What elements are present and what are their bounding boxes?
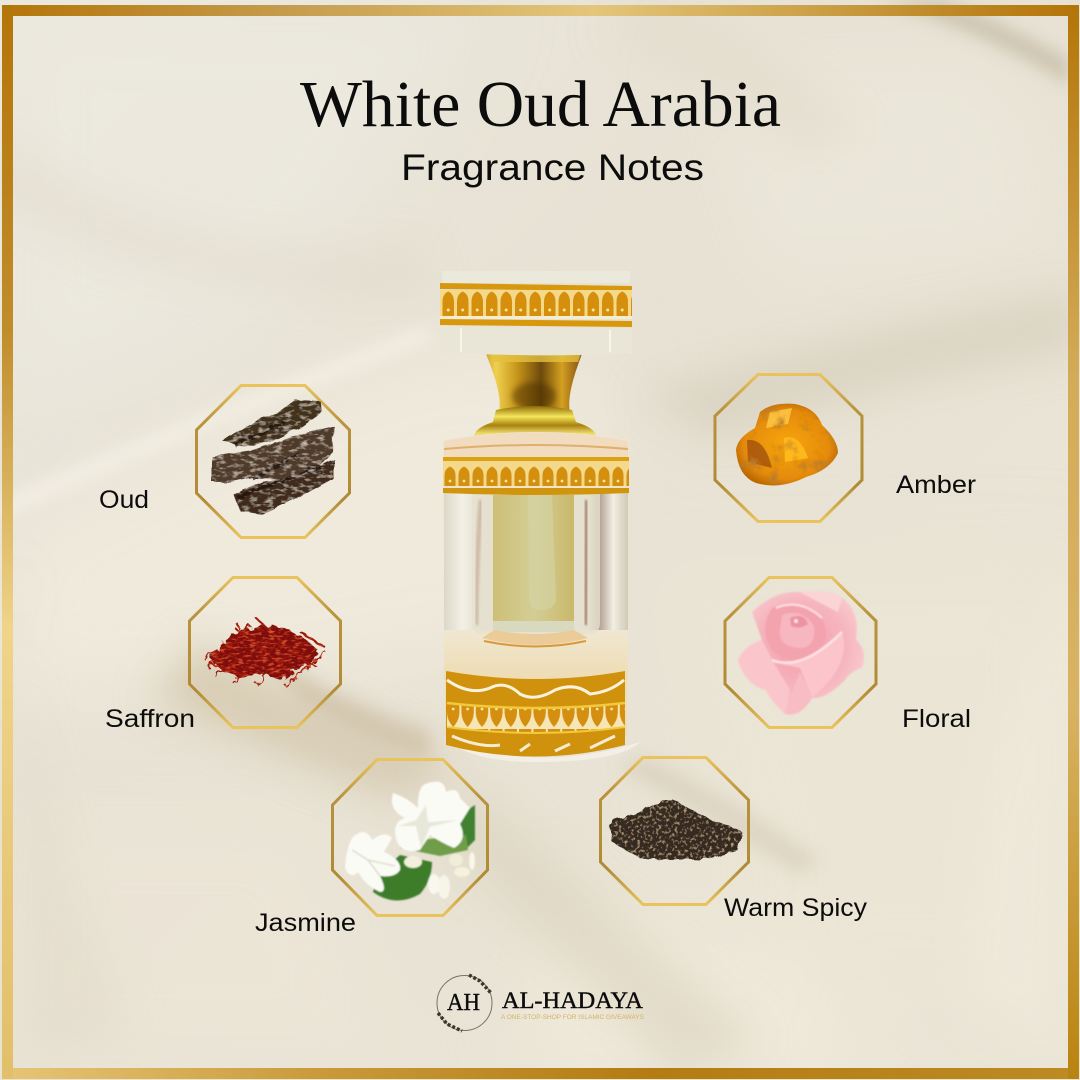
icon: jasmine flowers xyxy=(345,782,475,901)
octagon frame xyxy=(600,758,748,904)
upper body gold band xyxy=(443,457,629,495)
logo wordmark: AL-HADAYA xyxy=(502,988,643,1013)
subtitle: Fragrance Notes xyxy=(401,147,704,188)
note: amber xyxy=(715,374,862,522)
lower body gold band xyxy=(446,671,625,756)
bottle cap xyxy=(440,271,632,355)
label: Amber: Amber xyxy=(896,471,976,499)
label: Saffron: Saffron xyxy=(105,705,195,733)
note: jasmine xyxy=(332,760,488,916)
logo: Al-Hadaya xyxy=(437,975,644,1031)
logo monogram: AH xyxy=(447,990,480,1016)
note: oud xyxy=(196,386,350,538)
label: Oud: Oud xyxy=(99,486,149,514)
icon: oud wood bark xyxy=(212,400,334,515)
label: Jasmine: Jasmine xyxy=(255,909,356,937)
note: saffron xyxy=(190,578,340,728)
top ledge of body xyxy=(444,432,628,458)
note: floral xyxy=(725,578,876,728)
label: Warm Spicy: Warm Spicy xyxy=(724,894,868,922)
icon: saffron threads xyxy=(203,620,326,686)
icon: pink rose xyxy=(738,591,864,715)
neck and gold collar xyxy=(474,354,596,441)
octagon frame xyxy=(715,374,862,522)
octagon frame xyxy=(332,760,488,916)
icon: black pepper pile xyxy=(609,799,742,860)
logo wreath circle xyxy=(437,975,492,1031)
logo tagline: A ONE-STOP-SHOP FOR ISLAMIC GIVEAWAYS xyxy=(501,1015,644,1021)
octagon frame xyxy=(196,386,350,538)
octagon frame xyxy=(190,578,340,728)
oil chamber xyxy=(493,495,574,622)
title: White Oud Arabia xyxy=(300,68,781,141)
perfume bottle xyxy=(440,271,640,762)
octagon frame xyxy=(725,578,876,728)
icon: amber resin xyxy=(736,404,838,485)
note: warm spicy xyxy=(600,758,748,904)
label: Floral: Floral xyxy=(902,705,971,733)
bottle body xyxy=(443,432,629,756)
bottle shadow xyxy=(445,738,640,762)
cap gold band xyxy=(440,283,632,327)
